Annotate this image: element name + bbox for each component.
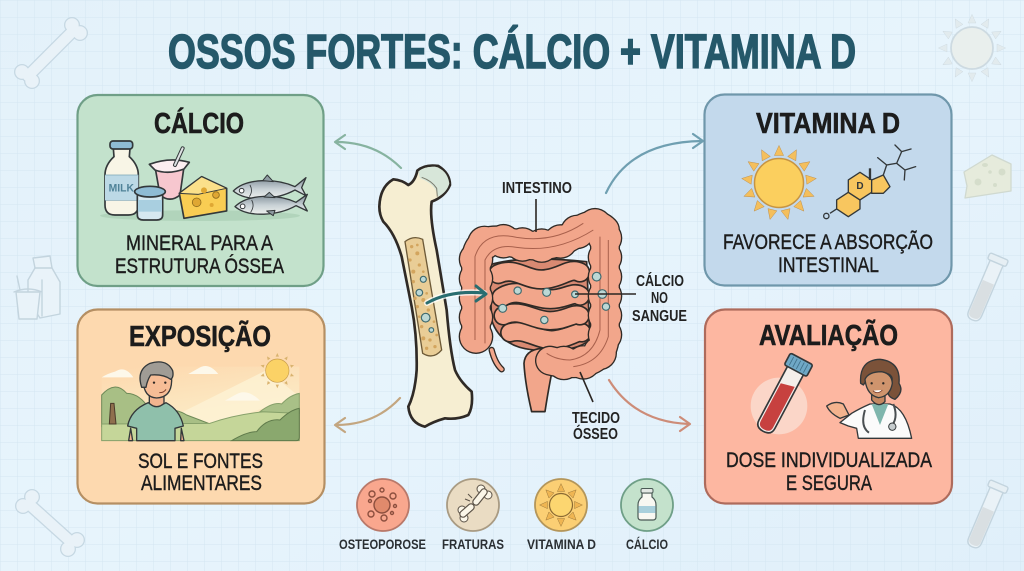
panel: cálcio (78, 95, 324, 286)
illustration: dairy foods and sardines: MILK (109, 183, 134, 195)
large intestine fill (476, 225, 605, 363)
arrow: intestine to avaliação (609, 380, 690, 431)
text: sol e fontes alimentares (138, 450, 263, 495)
panel: exposição (78, 310, 324, 504)
heading: avaliação: AVALIAÇÃO (759, 318, 898, 352)
decorative icon: bone top left (14, 17, 88, 89)
illustration: doctor (827, 359, 912, 438)
heading: cálcio: CÁLCIO (154, 106, 244, 140)
label: cálcio no sangue: SANGUE (632, 308, 687, 325)
icon: vitamin d molecule: D (856, 181, 864, 192)
arrow: bone to exposição (335, 398, 400, 432)
decorative icon: bone bottom left (15, 489, 85, 557)
icon: blood test tube (751, 353, 813, 437)
decorative icon: test tube upper (963, 253, 1009, 324)
calcium particles (499, 272, 610, 324)
illustration: intestine (475, 223, 610, 412)
panel: vitamina d (704, 94, 952, 286)
text: sol e fontes alimentares: ALIMENTARES (141, 472, 262, 495)
appendix (492, 350, 502, 369)
text: favorece a absorção intestinal: FAVORECE A ABSORÇÃO (723, 230, 933, 254)
rectum (524, 348, 560, 412)
illustration: femur bone (379, 166, 472, 427)
text: dose individualizada e segura: E SEGURA (786, 472, 872, 495)
large intestine outline (476, 225, 605, 363)
legend: fraturas: FRATURAS (442, 536, 504, 552)
text: mineral para a estrutura óssea (115, 232, 284, 278)
legend: osteoporose: OSTEOPOROSE (339, 536, 426, 552)
legend: vitamina d (527, 479, 596, 552)
colon inner lines (475, 223, 608, 367)
label: intestino: INTESTINO (502, 180, 572, 197)
label: tecido ósseo (572, 372, 620, 443)
decorative icon: sun top right (938, 14, 1006, 82)
label: tecido ósseo: TECIDO (572, 410, 620, 427)
illustration: man in the sun (102, 353, 299, 441)
decorative icon: test tube lower (963, 480, 1009, 551)
label: cálcio no sangue (575, 271, 687, 325)
icon: vitamin d molecule (824, 145, 916, 219)
small intestine (489, 259, 590, 351)
arrow: bone to cálcio (335, 135, 401, 168)
legend: osteoporose (339, 479, 426, 552)
legend: cálcio: CÁLCIO (626, 536, 668, 552)
illustration: dairy foods and sardines (100, 141, 307, 221)
label: intestino (502, 180, 572, 232)
label: cálcio no sangue: NO (651, 290, 668, 307)
text: mineral para a estrutura óssea: ESTRUTURA ÓSSEA (115, 255, 284, 278)
text: mineral para a estrutura óssea: MINERAL PARA A (126, 232, 273, 255)
legend: vitamina d: VITAMINA D (527, 536, 596, 552)
text: dose individualizada e segura (726, 449, 932, 495)
text: dose individualizada e segura: DOSE INDIVIDUALIZADA (726, 449, 932, 472)
legend: fraturas (442, 479, 504, 552)
heading: exposição: EXPOSIÇÃO (129, 319, 271, 353)
label: tecido ósseo: ÓSSEO (573, 424, 618, 443)
label: cálcio no sangue: CÁLCIO (636, 271, 684, 290)
legend: cálcio (621, 479, 673, 552)
panel: avaliação (705, 310, 952, 504)
decorative icon: milk carton and yogurt (14, 256, 60, 319)
arrow: intestine to vitamina d (606, 134, 703, 193)
decorative icon: cheese (964, 155, 1011, 198)
arrow: bone to intestine (427, 286, 486, 303)
text: favorece a absorção intestinal: INTESTINAL (778, 254, 879, 277)
heading: vitamina d: VITAMINA D (756, 108, 900, 140)
text: favorece a absorção intestinal (723, 230, 933, 277)
text: sol e fontes alimentares: SOL E FONTES (138, 450, 263, 473)
icon: sun (741, 145, 817, 221)
